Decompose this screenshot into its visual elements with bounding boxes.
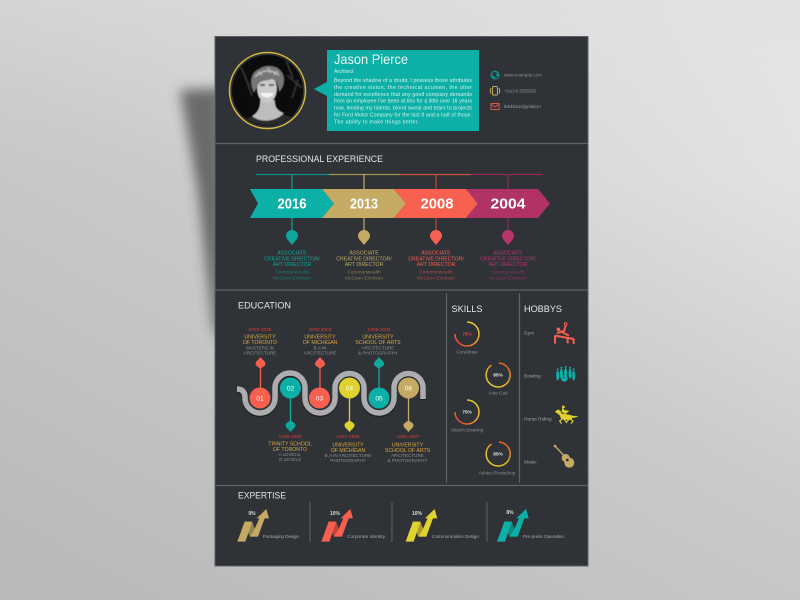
year arrow: 2016: 2016 xyxy=(278,196,306,212)
winding road xyxy=(237,373,423,414)
heading: EXPERTISE xyxy=(238,490,286,500)
node 04: B.A IN ARCITECTURE xyxy=(325,453,371,458)
year arrow: 2004: 2004 xyxy=(490,196,526,212)
node 02: TRINITY SCHOOL xyxy=(268,442,312,448)
biography: Beyond the shadow of a doubt, I possess those attributes xyxy=(334,78,472,84)
poster background xyxy=(215,36,588,566)
icon: gym xyxy=(555,323,574,344)
name: Jason Pierce xyxy=(334,51,408,67)
node 04: PHOTOGRAPHY xyxy=(330,458,366,463)
node 03 xyxy=(303,327,338,408)
node 05: SCHOOL OF ARTS xyxy=(355,340,401,346)
node 06: ARCITECTURE xyxy=(391,453,424,458)
role: 2016: Commonwealth xyxy=(275,270,309,276)
node 06: UNIVERSITY xyxy=(392,442,424,448)
node 05: 05 xyxy=(375,396,383,402)
hobby labels: Music xyxy=(524,460,537,466)
role: Architect xyxy=(334,69,354,75)
arrow metric: pre-press operation xyxy=(497,509,564,542)
skill ring: Auto Cad: 85% xyxy=(493,372,504,378)
arrow metric: pre-press operation: Pre-press Operation xyxy=(523,534,564,540)
node 03: OF MICHIGAN xyxy=(303,340,338,346)
dividers xyxy=(310,502,487,542)
node 06: 06 xyxy=(405,386,412,392)
icon: globe xyxy=(490,70,500,80)
arrow metric: packaging design: Packaging Design xyxy=(263,534,299,540)
skill ring: Adobe Photoshop: 85% xyxy=(493,452,504,458)
node 01 xyxy=(243,327,277,408)
node 06: 1995-1997 xyxy=(397,434,420,440)
year arrow: 2016 xyxy=(250,189,334,218)
hobby labels: Bowling xyxy=(524,374,541,380)
node 03: 2000-2003 xyxy=(309,327,332,333)
icon: mail xyxy=(491,104,499,110)
node 02: O LEVELS xyxy=(279,457,301,462)
role: 2016: CREATIVE DIRECTOR/ xyxy=(264,256,320,262)
panel: skills xyxy=(451,304,516,476)
contact details xyxy=(490,70,542,110)
skill ring: Auto Cad xyxy=(486,363,510,396)
skill ring: Coraldraw xyxy=(455,322,479,354)
role: 2013: McCann-Erickson xyxy=(345,276,383,282)
icon: guitar xyxy=(554,445,574,468)
role: 2016: ART DIRECTOR xyxy=(273,262,312,268)
contact details: www.example.com xyxy=(504,72,542,78)
skill ring: Auto Cad: Auto Cad xyxy=(488,390,508,396)
arrow metric: corporate identity xyxy=(321,509,386,542)
biography: the creative vision, the technical acumen, the utter xyxy=(334,85,472,91)
contact details: timrobinson@gmail.com xyxy=(504,104,541,109)
role: 2016 xyxy=(264,230,320,282)
skill ring: Coraldraw: Coraldraw xyxy=(457,350,478,354)
panel: hobbys xyxy=(524,304,578,468)
role: 2008: CREATIVE DIRECTOR/ xyxy=(408,256,464,262)
node 06 xyxy=(385,378,431,463)
role: 2004: ART DIRECTOR xyxy=(489,262,528,268)
role: 2013: ASSOCIATE xyxy=(349,250,379,256)
skill ring: Sketch Drawing xyxy=(451,400,484,432)
biography: The ability to make things better. xyxy=(334,119,419,125)
skill ring: Adobe Photoshop: Adobe Photoshop xyxy=(479,470,516,476)
year arrow: 2013: 2013 xyxy=(350,196,378,212)
contact details: +01(14) 5555555 xyxy=(504,88,536,94)
timeline rail xyxy=(256,174,543,176)
year arrow: 2008: 2008 xyxy=(420,196,454,212)
biography: for Ford Motor Company for the last 8 and a half of those. xyxy=(334,112,472,118)
node 06: SCHOOL OF ARTS xyxy=(385,448,431,454)
panel: header xyxy=(228,50,542,135)
panel: expertise xyxy=(237,490,564,542)
node 03: UNIVERSITY xyxy=(304,334,336,340)
bio callout xyxy=(314,50,479,131)
icon: horse rider xyxy=(555,406,578,424)
node 01: ARCITECTURE xyxy=(244,350,276,356)
heading: HOBBYS xyxy=(524,304,562,314)
node 05: & PHOTOGRAPHY xyxy=(358,350,398,356)
year arrow: 2004 xyxy=(466,189,550,218)
biography: now, lending my talents, blood sweat and tears to projects xyxy=(334,106,472,112)
role: 2013: ART DIRECTOR xyxy=(345,262,384,268)
year arrow: 2013 xyxy=(322,189,406,218)
icon: bowling xyxy=(556,366,575,382)
role: 2008: ASSOCIATE xyxy=(421,250,451,256)
hobby labels xyxy=(524,330,552,466)
arrow metric: pre-press operation: 8% xyxy=(506,510,514,516)
arrow metric: packaging design xyxy=(237,509,299,542)
node 03: ARCITECTURE xyxy=(304,350,336,356)
heading: SKILLS xyxy=(452,304,482,314)
node 01: MASTERS IN xyxy=(246,346,274,350)
node 01: UNIVERSITY xyxy=(244,334,276,340)
node 03: B.A IN xyxy=(313,346,327,350)
node 03: 03 xyxy=(316,396,323,402)
role: 2004 xyxy=(480,230,536,282)
role: 2008: Commonwealth xyxy=(419,270,453,276)
node 05: UNIVERSITY xyxy=(362,334,394,340)
arrow metric: packaging design: 9% xyxy=(248,511,256,517)
node 05: ARCITECTURE xyxy=(362,346,394,350)
node 02: 1998-1999 xyxy=(279,434,302,440)
skill ring: Sketch Drawing: 75% xyxy=(462,410,473,416)
icon: phone xyxy=(490,86,500,95)
arrow metric: corporate identity: 10% xyxy=(330,511,341,517)
node 04 xyxy=(325,378,371,463)
year arrow: 2008 xyxy=(394,189,478,218)
role: 2004: McCann-Erickson xyxy=(489,276,527,282)
heading: PROFESSIONAL EXPERIENCE xyxy=(256,154,383,164)
poster shadow xyxy=(180,88,222,345)
biography: from an employee I've been at this for a little over 16 years xyxy=(334,99,472,105)
arrow metric: communication design xyxy=(406,509,479,542)
role: 2008: McCann-Erickson xyxy=(417,276,455,282)
biography xyxy=(334,78,472,125)
role: 2004: CREATIVE DIRECTOR/ xyxy=(480,256,536,262)
biography: demand for excellence that any good company demands xyxy=(334,92,472,98)
arrow metric: communication design: 10% xyxy=(412,511,423,517)
role: 2016: McCann-Erickson xyxy=(273,276,311,282)
skill ring: Adobe Photoshop xyxy=(479,442,516,476)
section dividers xyxy=(215,144,588,486)
arrow metric: corporate identity: Corporate Identity xyxy=(347,534,386,540)
stems xyxy=(292,174,508,232)
node 02: A LEVELS, xyxy=(279,452,301,457)
node 04: 1997-1998 xyxy=(337,434,360,440)
role: 2013 xyxy=(336,230,392,282)
node 01: 01 xyxy=(256,396,264,402)
role: 2004: Commonwealth xyxy=(491,270,525,276)
role: 2008 xyxy=(408,230,464,282)
role: 2013: CREATIVE DIRECTOR/ xyxy=(336,256,392,262)
portrait photo xyxy=(228,52,306,135)
node 02 xyxy=(268,378,312,462)
hobby labels: Gym xyxy=(524,330,534,336)
panel: education xyxy=(237,300,431,463)
skill ring: Coraldraw: 75% xyxy=(462,332,473,338)
node 04: UNIVERSITY xyxy=(332,442,364,448)
node 04: 04 xyxy=(346,386,353,392)
panel: professional experience xyxy=(250,154,550,282)
arrow metric: communication design: Communication Design xyxy=(432,534,479,540)
role: 2016: ASSOCIATE xyxy=(277,250,307,256)
node 01: OF TORONTO xyxy=(243,340,277,346)
node 01: 2003-2005 xyxy=(249,327,272,333)
node 06: & PHOTOGRAPHY xyxy=(388,458,428,463)
node 04: OF MICHIGAN xyxy=(331,448,366,454)
role: 2013: Commonwealth xyxy=(347,270,381,276)
skill ring: Sketch Drawing: Sketch Drawing xyxy=(451,428,484,432)
node 05: 1999-2000 xyxy=(368,327,391,333)
role: 2004: ASSOCIATE xyxy=(493,250,523,256)
heading: EDUCATION xyxy=(238,300,291,310)
node 05 xyxy=(355,327,401,408)
role: 2008: ART DIRECTOR xyxy=(417,262,456,268)
node 02: OF TORONTO xyxy=(273,447,307,453)
hobby labels: Horse Riding xyxy=(524,416,552,422)
node 02: 02 xyxy=(287,386,294,392)
